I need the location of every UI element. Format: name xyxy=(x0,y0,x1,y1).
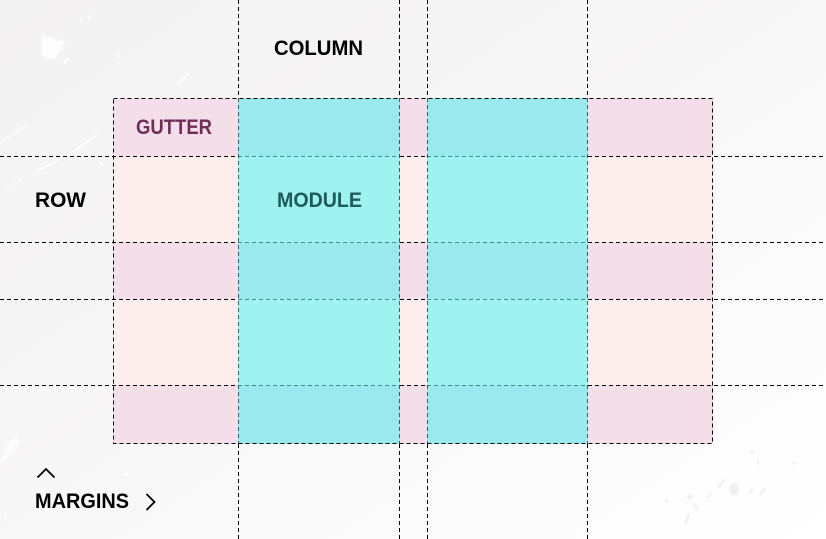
column guide lines xyxy=(238,0,588,539)
column 1 xyxy=(238,98,400,444)
icon: right chevron xyxy=(146,494,154,510)
label: margins: MARGINS xyxy=(35,490,129,513)
gutter band: bottom xyxy=(113,385,713,444)
icon: up chevron xyxy=(38,469,54,478)
label: module: MODULE xyxy=(277,189,362,212)
label: gutter: GUTTER xyxy=(136,116,212,139)
label: column: COLUMN xyxy=(274,37,363,60)
panel: margin box fill xyxy=(113,98,713,444)
gutter band: middle xyxy=(113,242,713,299)
row guide lines xyxy=(0,156,826,386)
gutter band: top xyxy=(113,98,713,156)
row lines across columns xyxy=(238,156,588,386)
margin box outline xyxy=(114,98,712,444)
column 2 xyxy=(427,98,588,444)
label: row: ROW xyxy=(35,189,86,212)
